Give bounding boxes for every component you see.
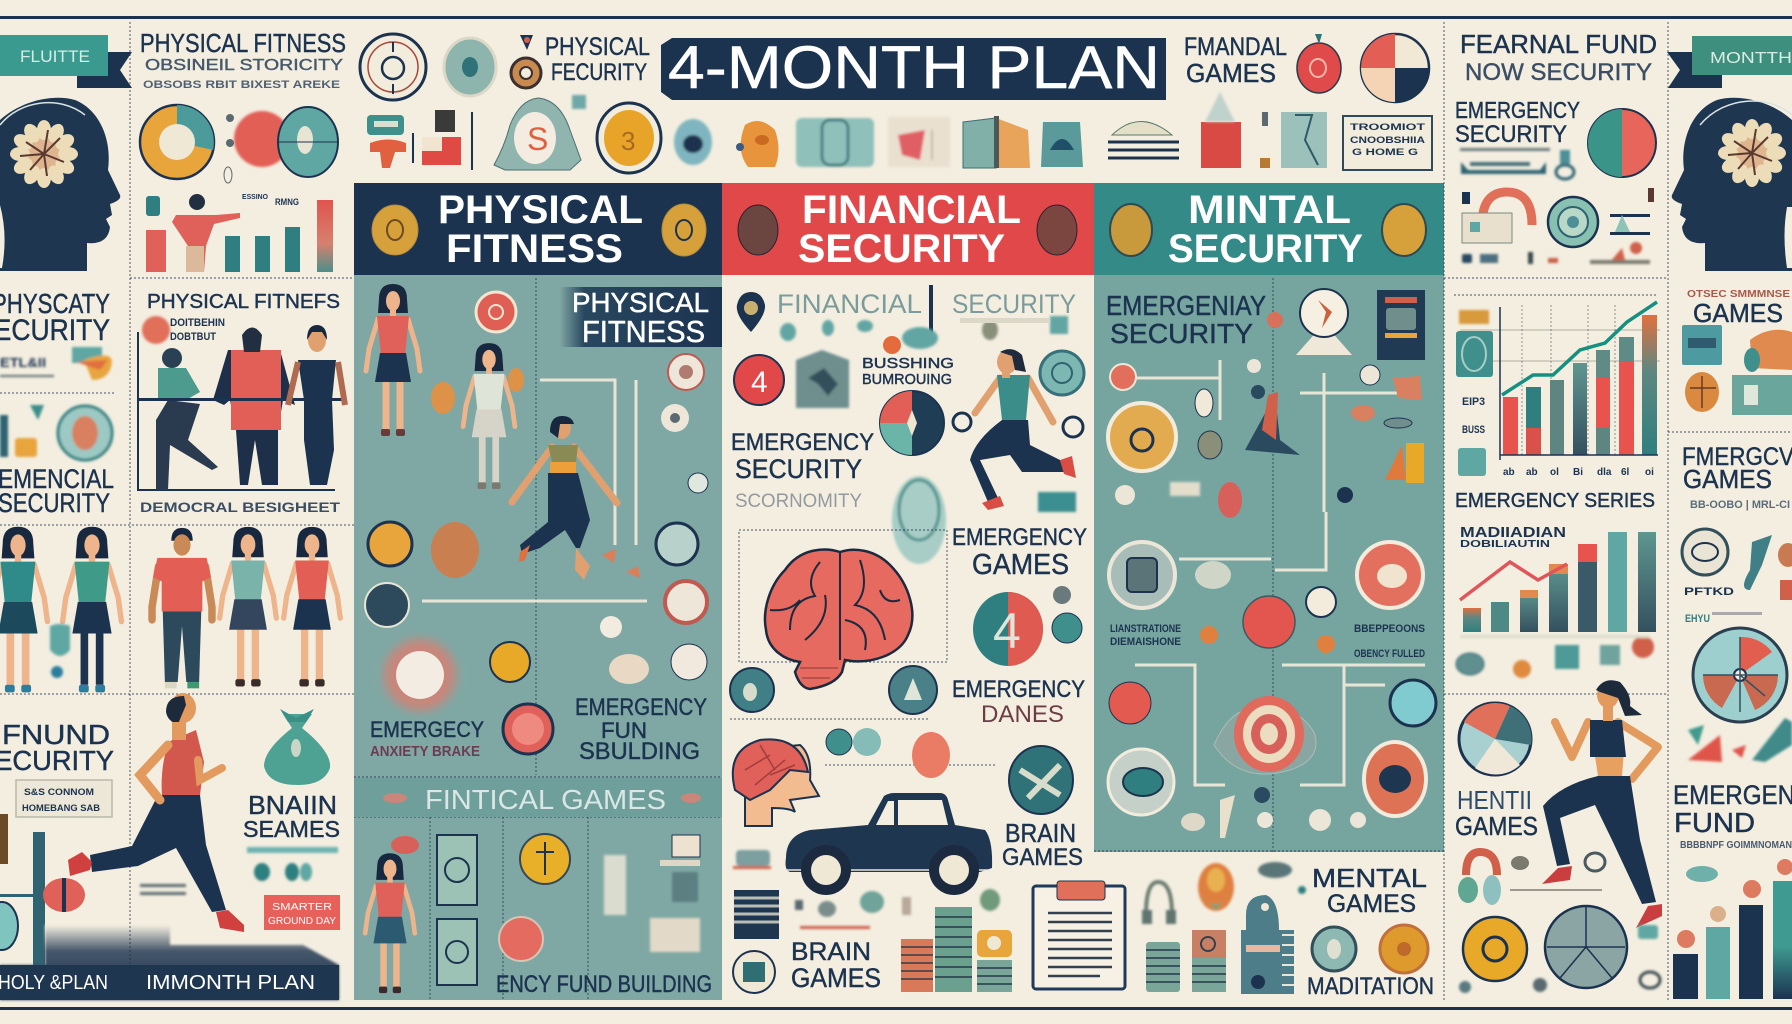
icons: medallions in panel bbox=[365, 292, 708, 754]
icons: small discs bbox=[826, 728, 950, 778]
heading: brain games: BRAIN bbox=[1005, 818, 1076, 848]
icon: stacks bbox=[901, 907, 1012, 992]
heading: mental games bbox=[1312, 863, 1427, 918]
heading: financial games: FMANDAL bbox=[1184, 33, 1287, 61]
note box: HOMEBANG SAB bbox=[22, 803, 101, 813]
heading: emergency danes bbox=[952, 676, 1085, 728]
figure: woman with red top bbox=[366, 284, 420, 436]
icons: small row bbox=[795, 889, 1000, 929]
heading: emergency security: SECURITY bbox=[1455, 121, 1567, 148]
top banner row bbox=[360, 33, 1432, 173]
label: mediation garbled: MADIIADIAN bbox=[1460, 524, 1566, 541]
note with icon bbox=[142, 316, 225, 344]
column: second left bbox=[68, 28, 346, 932]
small labels: BBEPPEOONS bbox=[1354, 623, 1425, 635]
heading: physical fitness: OBSINEIL STORICITY bbox=[145, 57, 343, 74]
heading: emergency security bbox=[1455, 97, 1580, 148]
heading: hentii games: HENTII bbox=[1457, 785, 1532, 815]
small labels: DIEMAISHONE bbox=[1110, 636, 1181, 648]
icon: red circle four bbox=[734, 355, 784, 405]
header: mental security: MINTAL bbox=[1188, 188, 1351, 232]
banner ground: plan bbox=[0, 925, 339, 1000]
ribbon: top left bbox=[0, 35, 132, 88]
panel: physical fitness bbox=[354, 183, 722, 1000]
heading: emergen fund: FUND bbox=[1674, 807, 1755, 838]
icon: barbell post bbox=[0, 814, 85, 965]
chart: mediation bars and red line bbox=[1460, 532, 1656, 632]
icon: red and teal discs bbox=[224, 107, 338, 183]
heading: financial games bbox=[1184, 33, 1287, 88]
small labels bbox=[1110, 623, 1425, 660]
heading: financial security faded bbox=[777, 289, 1076, 319]
chart: bars with person: RMNG bbox=[275, 197, 299, 207]
label: red note bbox=[264, 895, 340, 930]
chart: quadrant pie bbox=[1361, 34, 1429, 102]
heading: fmergcv games: BB-OOBO | MRL-CI bbox=[1690, 499, 1790, 511]
icon: brain bbox=[765, 550, 912, 689]
label: building: BUMROUING bbox=[862, 371, 952, 388]
heading: emencial security: SECURITY bbox=[0, 488, 110, 518]
heading: physical fitness bbox=[140, 28, 346, 91]
note with icon: DOBTBUT bbox=[170, 331, 216, 343]
heading: financial games: GAMES bbox=[1186, 58, 1276, 88]
heading: emergency games: EMERGENCY bbox=[952, 524, 1087, 551]
icon: head with brain bbox=[0, 98, 120, 271]
icon: screen with text: G HOME G bbox=[1352, 147, 1418, 157]
icon: pin and coin bbox=[511, 35, 541, 88]
heading: brain games: BNAIIN bbox=[248, 790, 337, 820]
sub-heading: physical fitness: PHYSICAL bbox=[572, 287, 709, 318]
ribbon: top right bbox=[1667, 36, 1792, 88]
icon: gray wheel bbox=[1545, 906, 1627, 988]
bottom row: mental games bbox=[1142, 862, 1434, 1000]
heading: emergency series: EMERGENCY SERIES bbox=[1455, 490, 1655, 512]
heading: emergency security: SECURITY bbox=[735, 454, 862, 484]
labels: emergency: EMERGECY bbox=[370, 717, 484, 742]
icons: medallions in panel bbox=[1108, 359, 1436, 838]
sub-heading: physical fitness: FITNESS bbox=[582, 314, 705, 349]
heading: emencial security: EMENCIAL bbox=[0, 464, 114, 494]
chart: growth bars and green line: oi bbox=[1645, 467, 1654, 478]
icon: device bbox=[1377, 290, 1425, 360]
icon: note and small card bbox=[0, 347, 112, 380]
chart: yellow pie bbox=[140, 105, 214, 179]
header: physical fitness bbox=[354, 183, 722, 275]
heading: brain games: GAMES bbox=[1002, 844, 1083, 871]
icons: under bars bbox=[1456, 635, 1654, 678]
panel background bbox=[1094, 275, 1444, 852]
column: second right bbox=[1444, 22, 1668, 1000]
heading: brain games: SEAMES bbox=[243, 816, 340, 842]
chart: growth bars and green line: Bi bbox=[1573, 467, 1583, 478]
dashed frame bbox=[730, 530, 995, 765]
panel background bbox=[354, 275, 722, 1000]
heading: emergency security: EMERGENCY bbox=[1455, 97, 1580, 123]
icons: dark bits row bbox=[1462, 242, 1650, 264]
heading: fmergcv games bbox=[1682, 443, 1792, 511]
icons: upper right circle cluster: PFTKD bbox=[1684, 586, 1734, 598]
icon: teal bag bbox=[1041, 122, 1083, 167]
header: mental security bbox=[1094, 183, 1444, 275]
label: mediation garbled: DOBILIAUTIN bbox=[1460, 539, 1550, 550]
heading: brain games lower bbox=[791, 938, 881, 993]
top rule bbox=[0, 16, 1792, 19]
chart: fund bars bbox=[1673, 859, 1792, 999]
note with icon: DOITBEHIN bbox=[170, 317, 225, 329]
icons: figures under wheel bbox=[1688, 718, 1792, 762]
small labels: LIANSTRATIONE bbox=[1110, 623, 1181, 635]
heading: fund and security bbox=[1460, 29, 1657, 86]
chart: big wheel bbox=[1693, 628, 1787, 722]
icon: shield bbox=[796, 350, 849, 408]
heading: fund and security: NOW SECURITY bbox=[1465, 59, 1652, 86]
heading: emergency security: EMERGENCY bbox=[731, 429, 874, 456]
icons: left tools bbox=[367, 110, 472, 170]
ribbon: top right: MONTTH bbox=[1710, 50, 1792, 67]
icon: red disc bbox=[1297, 34, 1341, 93]
header: physical fitness: FITNESS bbox=[446, 227, 623, 271]
heading: financial security faded: SECURITY bbox=[952, 289, 1076, 319]
chart: growth bars and green line: ol bbox=[1550, 467, 1559, 478]
heading: physical fecurity bbox=[545, 33, 650, 86]
icon: striped box bbox=[734, 890, 779, 939]
heading: emergency fun sbulding: EMERGENCY bbox=[575, 694, 707, 721]
heading: hentii games bbox=[1455, 785, 1538, 841]
heading: physical fecurity: PHYSICAL bbox=[545, 33, 650, 61]
chart: segmented circle bbox=[1459, 703, 1532, 775]
icon: yellow badge bbox=[1463, 917, 1527, 981]
icon: teal gem bbox=[674, 119, 712, 165]
heading: physical fitness: PHYSICAL FITNESS bbox=[140, 28, 346, 58]
icon: screen with text: CNOOBSHIIA bbox=[1350, 135, 1426, 145]
icons: games cluster bbox=[1682, 325, 1792, 415]
icon: red circle four: 4 bbox=[751, 366, 768, 399]
caption: democral: DEMOCRAL BESIGHEET bbox=[140, 499, 341, 515]
dividers: mental bbox=[1094, 278, 1444, 852]
caption: emergency fund building: ENCY FUND BUILDING bbox=[496, 971, 712, 998]
label: building: BUSSHING bbox=[862, 355, 954, 372]
icons: chart sidebar bbox=[1456, 310, 1493, 476]
chart: quadrant pie bbox=[880, 391, 944, 455]
figure: leaping woman bbox=[512, 416, 617, 580]
icon: clipboard bbox=[1033, 881, 1125, 989]
icons: small lower bits bbox=[1459, 925, 1660, 993]
icons: banknotes bbox=[437, 835, 477, 985]
icon: money bag bbox=[264, 709, 330, 785]
icons: teal medallions bbox=[730, 666, 937, 714]
chart: bars with person: ESSINO bbox=[242, 194, 269, 201]
dividers: physical bbox=[354, 278, 722, 1000]
icons: coin rings bbox=[1040, 351, 1084, 437]
icon: yellow coin: 3 bbox=[621, 126, 635, 156]
icon: screen with text bbox=[1343, 116, 1432, 170]
icon: car bbox=[785, 793, 992, 895]
heading: emergency fun sbulding: SBULDING bbox=[579, 738, 700, 765]
small labels: OBENCY FULLED bbox=[1354, 648, 1425, 660]
label: red note: SMARTER bbox=[272, 902, 332, 913]
sub-heading: physical fitness bbox=[560, 287, 722, 349]
figure: woman in teal bbox=[0, 527, 47, 692]
icon: teal ring fading bbox=[892, 476, 1076, 564]
icons: upper right circle cluster: EHYU bbox=[1685, 613, 1710, 625]
heading: emergency fun sbulding: FUN bbox=[601, 718, 647, 743]
heading: games bbox=[1687, 289, 1790, 328]
icon: four badge: 4 bbox=[993, 603, 1021, 659]
heading: emergency security bbox=[731, 429, 874, 512]
title: 4-month plan: 4-MONTH PLAN bbox=[668, 34, 1160, 101]
heading: brain games bbox=[243, 790, 340, 842]
heading: emergen fund bbox=[1673, 780, 1792, 851]
icon: bank bbox=[1241, 895, 1294, 994]
figure: woman in red top bbox=[284, 527, 340, 686]
column: far left bbox=[0, 22, 354, 1000]
icon: head with brain bbox=[733, 739, 819, 826]
icon: helmet with s: S bbox=[527, 121, 548, 157]
heading: games: GAMES bbox=[1693, 298, 1783, 328]
heading: games: OTSEC SMMMNSE bbox=[1687, 289, 1790, 300]
icons: chart sidebar: BUSS bbox=[1462, 424, 1485, 436]
icons: arch and target bbox=[1462, 188, 1654, 247]
icon: cream badge bbox=[733, 951, 775, 993]
divider right bbox=[1668, 431, 1792, 433]
chart: growth bars and green line: ab bbox=[1526, 467, 1538, 478]
icon: small car bbox=[733, 850, 771, 869]
chart: growth bars and green line bbox=[1460, 302, 1660, 478]
heading: emergency fun sbulding bbox=[575, 694, 707, 765]
icon: teal panel bbox=[1281, 112, 1327, 168]
chart: half pie bbox=[1588, 109, 1656, 177]
heading: financial security faded: FINANCIAL bbox=[777, 289, 922, 319]
icon row bbox=[140, 847, 338, 895]
figure: running woman bbox=[68, 693, 244, 932]
heading: physical fitness: OBSOBS RBIT BIXEST AREKE bbox=[143, 79, 340, 91]
icon: note and small card: ETL&II bbox=[0, 355, 46, 370]
label: building bbox=[862, 355, 954, 388]
icon: red box with figure bbox=[1201, 92, 1270, 168]
icon: stripes dome bbox=[1108, 122, 1179, 158]
note box bbox=[16, 780, 112, 817]
icons: top row financial bbox=[737, 285, 1068, 354]
heading: brain games lower: GAMES bbox=[791, 963, 881, 993]
heading: emergency danes: EMERGENCY bbox=[952, 676, 1085, 703]
bottom rule bbox=[0, 1007, 1792, 1010]
heading: physical fecurity: FECURITY bbox=[551, 59, 647, 86]
label: red note: GROUND DAY bbox=[268, 916, 336, 927]
icon: folder pair bbox=[963, 116, 1030, 168]
icon: head with brain right bbox=[1672, 98, 1792, 271]
chart: bars with person bbox=[146, 194, 333, 272]
heading: emergency security: SECURITY bbox=[1110, 318, 1253, 349]
heading: fund security: FNUND bbox=[2, 719, 110, 750]
heading: physical security bbox=[0, 288, 110, 347]
ribbon: top left: FLUITTE bbox=[20, 47, 90, 66]
heading: fund and security: FEARNAL FUND bbox=[1460, 29, 1657, 59]
icon: orange pouch bbox=[736, 121, 778, 167]
caption: maditation: MADITATION bbox=[1307, 973, 1434, 1000]
header: mental security: SECURITY bbox=[1168, 227, 1363, 271]
heading: hentii games: GAMES bbox=[1455, 811, 1538, 841]
icons: coins bbox=[1312, 925, 1428, 973]
icons: coins and misc bbox=[391, 834, 700, 961]
icons: device row bbox=[1460, 148, 1574, 179]
figure: woman in light outfit bbox=[463, 343, 515, 489]
icons: chart sidebar: EIP3 bbox=[1462, 396, 1485, 408]
strip: fintical games bbox=[354, 778, 722, 817]
dividers: left columns bbox=[0, 22, 354, 1000]
heading: fmergcv games: GAMES bbox=[1683, 464, 1772, 494]
header: financial security: SECURITY bbox=[798, 227, 1005, 271]
heading: emergency games: GAMES bbox=[972, 549, 1069, 581]
heading: brain games bbox=[1002, 818, 1083, 871]
icon: screen with text: TROOMIOT bbox=[1350, 122, 1426, 132]
icon: ring clock bbox=[360, 34, 426, 100]
heading: mental games: MENTAL bbox=[1312, 863, 1427, 893]
header: financial security: FINANCIAL bbox=[802, 188, 1021, 232]
figure: lunging woman in teal bbox=[953, 349, 1076, 510]
icons: headphones and oval bbox=[1142, 862, 1306, 924]
icon: yellow coin bbox=[597, 103, 661, 173]
heading: fund security bbox=[0, 719, 114, 776]
figure: small woman bbox=[365, 853, 415, 993]
chart: growth bars and green line: ab bbox=[1503, 467, 1515, 478]
scene: three people at bar bbox=[138, 325, 345, 490]
icon: teal bag bbox=[50, 624, 70, 678]
icon: target badge bbox=[0, 405, 112, 460]
labels: emergency: ANXIETY BRAKE bbox=[370, 743, 480, 760]
icons: headset and small bbox=[1458, 852, 1605, 905]
icon: helmet with s bbox=[494, 95, 586, 170]
label: mediation garbled bbox=[1460, 524, 1566, 550]
panel: financial security bbox=[722, 183, 1125, 993]
heading: emergency games bbox=[952, 524, 1087, 581]
dividers bbox=[1444, 22, 1668, 1000]
icon: clock on stand bbox=[1267, 289, 1352, 355]
strip: fintical games: FINTICAL GAMES bbox=[425, 784, 666, 815]
heading: emergency security: EMERGENIAY bbox=[1106, 290, 1266, 321]
heading: emergency security: SCORNOMITY bbox=[735, 491, 862, 512]
heading: physical fitnefs: PHYSICAL FITNEFS bbox=[147, 291, 340, 313]
note box: S&S CONNOM bbox=[24, 787, 94, 797]
heading: emergency danes: DANES bbox=[981, 701, 1064, 728]
icons: stacks bbox=[1146, 930, 1226, 992]
labels: emergency bbox=[370, 717, 484, 760]
chart: growth bars and green line: dla bbox=[1597, 467, 1612, 478]
icon: teal disc bbox=[444, 38, 496, 96]
icon: four badge bbox=[973, 586, 1082, 666]
heading: mental games: GAMES bbox=[1327, 890, 1416, 918]
icon: teal frame bbox=[796, 118, 874, 167]
header: physical fitness: PHYSICAL bbox=[438, 188, 643, 232]
icon: pink card bbox=[888, 117, 950, 167]
heading: brain games lower: BRAIN bbox=[791, 938, 871, 966]
banner ground: plan: HOLY &PLAN bbox=[0, 972, 108, 994]
chart: growth bars and green line: 6l bbox=[1621, 467, 1630, 478]
icons: upper right circle cluster bbox=[1682, 529, 1792, 625]
header: financial security bbox=[722, 183, 1094, 275]
banner ground: plan: IMMONTH PLAN bbox=[146, 972, 315, 994]
panel: mental security bbox=[1094, 183, 1444, 852]
heading: emergency security bbox=[1106, 290, 1266, 349]
figure: lunging woman in black bbox=[1510, 680, 1662, 928]
figure: woman in green top bbox=[220, 527, 276, 686]
column: far right bbox=[1667, 36, 1792, 999]
figure: woman in green bbox=[63, 527, 121, 692]
figure: man in red bbox=[152, 528, 212, 688]
icon: teal medallion with cross bbox=[1009, 746, 1073, 814]
heading: emencial security bbox=[0, 464, 114, 518]
